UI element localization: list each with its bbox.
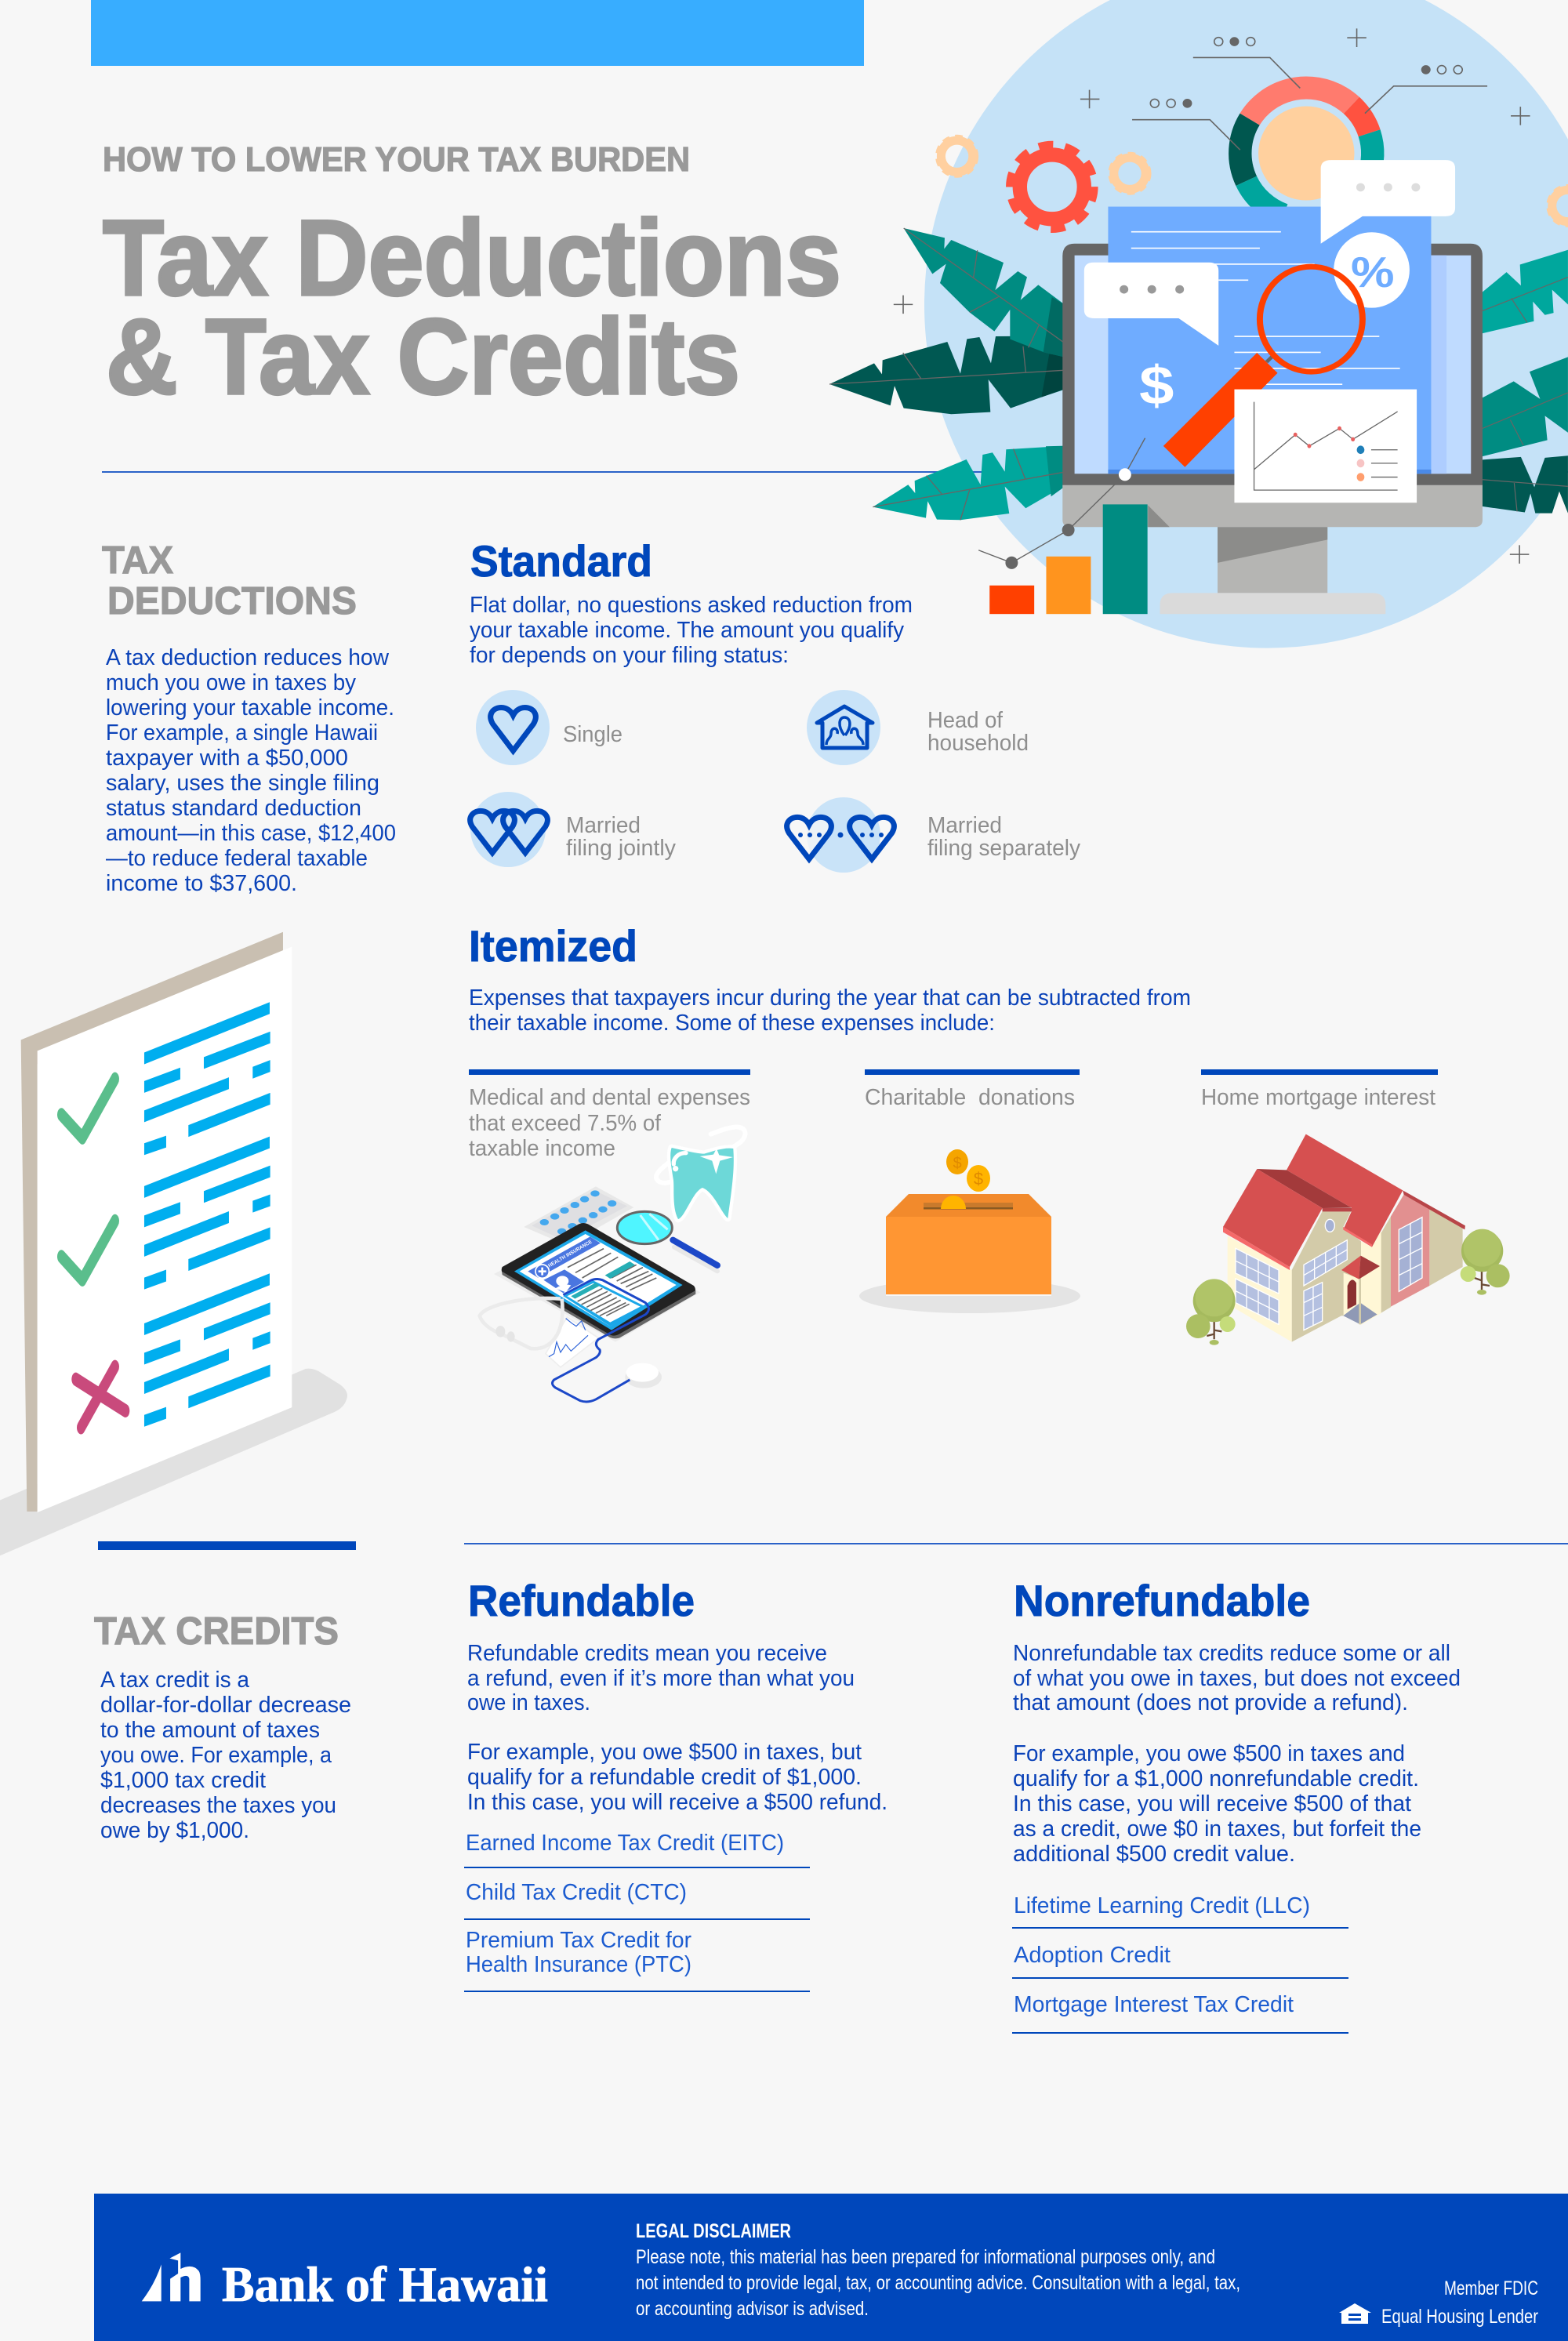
icon: single heart [476, 690, 550, 765]
left tree [1186, 1279, 1236, 1345]
heading: refundable: Refundable [468, 1576, 695, 1625]
chest piece [625, 1363, 662, 1388]
document on screen [1108, 207, 1431, 474]
refundable description: a refund, even if it’s more than what you [467, 1666, 855, 1691]
panel: refundable credits [464, 1576, 887, 1992]
column: home mortgage interest: Home mortgage interest [1201, 1085, 1436, 1110]
standard description: your taxable income. The amount you qualify [470, 618, 904, 643]
nonrefundable description: as a credit, owe $0 in taxes, but forfeit the [1013, 1817, 1421, 1842]
donut chart [1213, 60, 1400, 246]
itemized description: their taxable income. Some of these expenses include: [469, 1011, 995, 1036]
nonrefundable credit list [1012, 1893, 1348, 2034]
tax credit description: owe by $1,000. [100, 1818, 249, 1843]
panel: standard deduction [470, 536, 1080, 873]
decorative plus marks [894, 28, 1530, 564]
bar chart with trend line [978, 438, 1148, 614]
heading: standard: Standard [470, 536, 652, 586]
nonrefundable description: For example, you owe $500 in taxes and [1013, 1741, 1405, 1766]
label: married filing separately: Married [927, 813, 1002, 838]
standard description: Flat dollar, no questions asked reduction from [470, 593, 913, 618]
member fdic and equal housing lender: Member FDIC [1444, 2277, 1538, 2299]
tax deduction description: income to $37,600. [106, 871, 297, 896]
standard description [470, 593, 913, 668]
label: single: Single [563, 722, 622, 747]
illustration: house with trees [1186, 1134, 1510, 1345]
heading: tax deductions [102, 539, 357, 622]
refundable description: owe in taxes. [467, 1690, 590, 1715]
tax deduction description [106, 645, 396, 896]
title: & Tax Credits [106, 297, 740, 417]
panel: tax credits sidebar [94, 1610, 351, 1843]
tax credit description: $1,000 tax credit [100, 1768, 266, 1793]
label: married filing jointly: filing jointly [566, 836, 676, 861]
hero subtitle: HOW TO LOWER YOUR TAX BURDEN [103, 140, 690, 179]
icon: check mark one [61, 1079, 115, 1138]
itemized description [469, 985, 1191, 1036]
nonrefundable credit list: Mortgage Interest Tax Credit [1014, 1992, 1294, 2017]
itemized description: Expenses that taxpayers incur during the year that can be subtracted from [469, 985, 1191, 1011]
nonrefundable description: Nonrefundable tax credits reduce some or all [1013, 1641, 1450, 1666]
label: married filing separately [927, 813, 1080, 861]
nonrefundable description: additional $500 credit value. [1013, 1842, 1295, 1867]
palm leaves right [1480, 250, 1568, 514]
refundable description [467, 1641, 887, 1815]
label: head of household [927, 708, 1029, 756]
tax credit description: A tax credit is a [100, 1668, 250, 1693]
panel: tax deductions sidebar [102, 539, 396, 896]
tax deduction description: much you owe in taxes by [106, 670, 356, 695]
line chart card [1234, 390, 1417, 503]
ghost stethoscope and ECG paper [480, 1298, 598, 1367]
illustration: donation box with coins [859, 1149, 1080, 1313]
illustration: medical tablet, tooth and stethoscope [480, 1127, 746, 1402]
tax deduction description: —to reduce federal taxable [106, 846, 368, 871]
panel: itemized deduction [469, 921, 1510, 1402]
column: charitable donations: Charitable donations [865, 1085, 1075, 1110]
right tree [1461, 1229, 1510, 1295]
refundable description: qualify for a refundable credit of $1,000. [467, 1765, 862, 1790]
logo wordmark: Bank of Hawaii [222, 2256, 548, 2312]
icon: married filing jointly [470, 792, 547, 867]
tax deduction description: For example, a single Hawaii [106, 720, 378, 746]
column: medical expenses [469, 1069, 750, 1161]
nonrefundable description [1013, 1641, 1461, 1867]
tax credit description [100, 1668, 351, 1843]
tax credit description: decreases the taxes you [100, 1793, 336, 1818]
refundable credit list: Health Insurance (PTC) [466, 1952, 691, 1977]
nonrefundable credit list: Adoption Credit [1014, 1943, 1171, 1968]
tax deduction description: lowering your taxable income. [106, 695, 394, 720]
illustration: checklist document [0, 932, 347, 1555]
insurance paper [563, 1280, 645, 1327]
heading: itemized: Itemized [469, 921, 637, 971]
icon: dollar sign: $ [1139, 354, 1174, 416]
refundable credit list: Earned Income Tax Credit (EITC) [466, 1831, 784, 1856]
footer band [94, 2194, 1568, 2341]
heading: tax deductions: DEDUCTIONS [107, 580, 357, 622]
nonrefundable description: qualify for a $1,000 nonrefundable credit. [1013, 1766, 1419, 1791]
tax deduction description: taxpayer with a $50,000 [106, 746, 348, 771]
column: medical expenses: Medical and dental expenses [469, 1085, 750, 1110]
tax deduction description: salary, uses the single filing [106, 771, 379, 796]
label: married filing jointly [566, 813, 676, 861]
refundable credit list [464, 1831, 810, 1992]
refundable description: For example, you owe $500 in taxes, but [467, 1740, 862, 1765]
refundable description: Refundable credits mean you receive [467, 1641, 827, 1666]
tax credit description: to the amount of taxes [100, 1718, 320, 1743]
tooth [656, 1127, 746, 1219]
nonrefundable description: that amount (does not provide a refund). [1013, 1690, 1408, 1715]
tax credit description: you owe. For example, a [100, 1743, 332, 1768]
tax deduction description: A tax deduction reduces how [106, 645, 390, 670]
label: head of household: Head of [927, 708, 1004, 733]
back roof [1287, 1134, 1465, 1247]
windows [1236, 1218, 1422, 1330]
nonrefundable credit list: Lifetime Learning Credit (LLC) [1014, 1893, 1310, 1918]
tablet [494, 1223, 700, 1342]
tax deduction description: amount—in this case, $12,400 [106, 821, 396, 846]
speech bubble left [1084, 263, 1218, 346]
tax credit description: dollar-for-dollar decrease [100, 1693, 351, 1718]
icon: bank logo mark [142, 2252, 201, 2301]
magnifier [617, 1211, 717, 1271]
computer monitor [1062, 244, 1483, 614]
icon: cross mark [76, 1366, 125, 1428]
tablet: HEALTH INSURANCE [547, 1239, 593, 1268]
refundable description: In this case, you will receive a $500 refund. [467, 1790, 887, 1815]
illustration: donation box with coins: $ [974, 1169, 983, 1189]
magnifying glass [1163, 267, 1363, 467]
standard description: for depends on your filing status: [470, 643, 789, 668]
refundable credit list: Child Tax Credit (CTC) [466, 1880, 687, 1905]
stethoscope tube [553, 1279, 648, 1402]
icon: percent badge: % [1351, 249, 1395, 296]
nonrefundable description: In this case, you will receive $500 of that [1013, 1791, 1411, 1817]
walls [1228, 1194, 1463, 1342]
heading: tax credits: TAX CREDITS [94, 1610, 339, 1653]
title [103, 198, 841, 417]
legal disclaimer: LEGAL DISCLAIMER [636, 2220, 791, 2242]
title: Tax Deductions [103, 198, 841, 318]
hero illustration: computer with documents and chart [829, 0, 1568, 648]
top accent bar [91, 0, 864, 66]
column: charitable donations [865, 1069, 1080, 1110]
icon: check mark two [61, 1221, 115, 1279]
panel: nonrefundable credits [1012, 1576, 1461, 2034]
speech bubble right [1321, 160, 1455, 244]
heading: tax deductions: TAX [102, 539, 173, 582]
column: medical expenses: that exceed 7.5% of [469, 1111, 662, 1136]
legal disclaimer: Please note, this material has been prepared for informational purposes only, and [636, 2246, 1215, 2268]
illustration: donation box with coins: $ [953, 1155, 962, 1172]
legal disclaimer [636, 2220, 1240, 2320]
icon: head of household [807, 690, 880, 765]
background circle [924, 0, 1568, 648]
icon: gears [937, 136, 1568, 229]
label: married filing separately: filing separately [927, 836, 1080, 861]
pill pack [524, 1186, 633, 1245]
chart callout lines and dots [1132, 38, 1487, 150]
nonrefundable description: of what you owe in taxes, but does not exceed [1013, 1666, 1461, 1691]
front roof [1223, 1169, 1352, 1270]
icon: married filing separately [787, 797, 894, 873]
palm leaves left [829, 228, 1066, 520]
column: medical expenses: taxable income [469, 1136, 615, 1161]
icon: percent badge [1334, 232, 1410, 308]
tax deduction description: status standard deduction [106, 796, 361, 821]
legal disclaimer: or accounting advisor is advised. [636, 2298, 869, 2320]
column: home mortgage interest [1201, 1069, 1438, 1110]
label: married filing jointly: Married [566, 813, 641, 838]
member fdic and equal housing lender [1339, 2277, 1538, 2328]
refundable credit list: Premium Tax Credit for [466, 1928, 691, 1953]
label: head of household: household [927, 731, 1029, 756]
heading: nonrefundable: Nonrefundable [1014, 1576, 1310, 1625]
checklist text lines [144, 1002, 270, 1427]
porch [1341, 1256, 1380, 1324]
legal disclaimer: not intended to provide legal, tax, or accounting advice. Consultation with a legal, tax, [636, 2272, 1240, 2294]
